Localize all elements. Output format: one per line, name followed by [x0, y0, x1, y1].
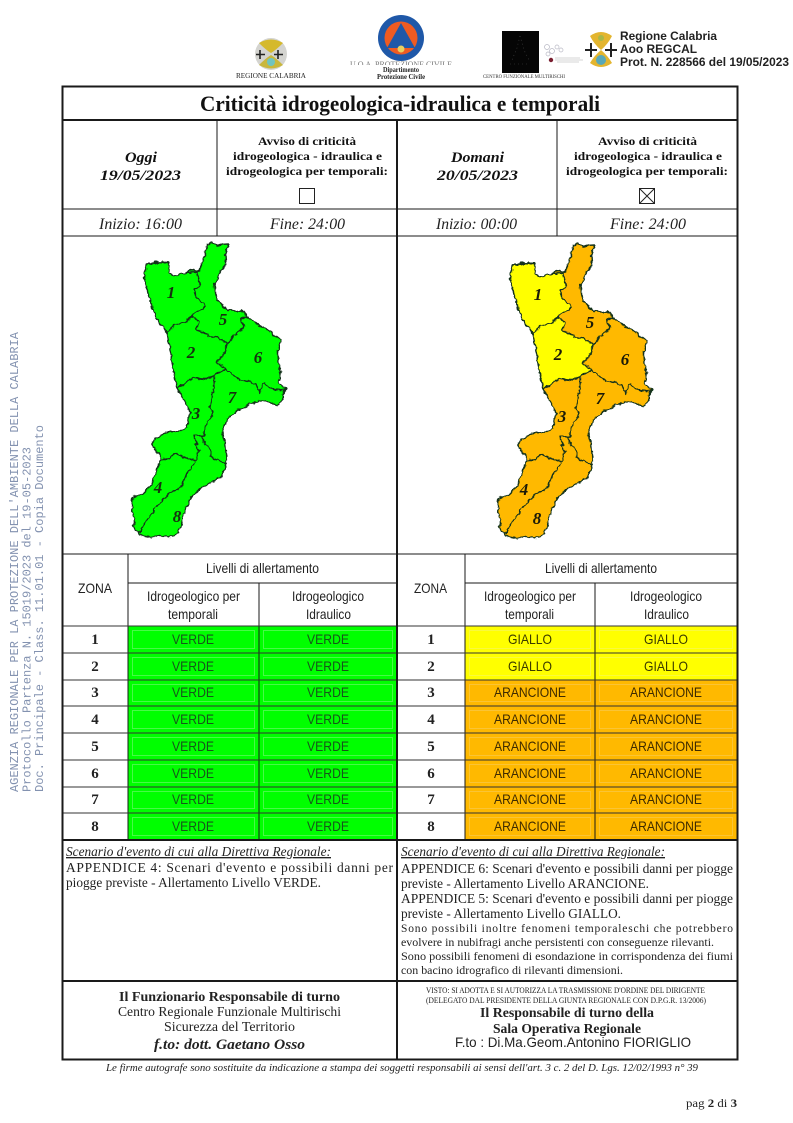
- today table header: Livelli di allertamento: [206, 560, 319, 576]
- panel: today alert table: [78, 560, 397, 840]
- tomorrow levels fill: [465, 626, 737, 840]
- today scenario body: [66, 860, 394, 890]
- tomorrow zone numbers: 3: [427, 685, 435, 701]
- panel: operations room signature: F.to : Di.Ma.Geom.Antonino FIORIGLIO: [455, 1034, 691, 1050]
- panel: tomorrow header: [435, 134, 728, 233]
- tomorrow level labels: GIALLO: [508, 658, 552, 674]
- today level labels: VERDE: [307, 791, 349, 807]
- tomorrow level labels: GIALLO: [644, 658, 688, 674]
- tomorrow table header: Idrogeologico: [630, 588, 702, 604]
- zone numbers tomorrow: 5: [586, 313, 595, 332]
- today table header: Idrogeologico: [292, 588, 364, 604]
- protocol stamp text: [620, 31, 789, 69]
- panel: duty officer signature: Il Funzionario Responsabile di turno: [119, 989, 340, 1004]
- panel: operations room signature: VISTO: SI ADOTTA E SI AUTORIZZA LA TRASMISSIONE D'ORDINE DEL DIRIGENTE: [426, 986, 705, 995]
- today date: [100, 150, 182, 184]
- tomorrow scenario appendices: APPENDICE 5: Scenari d'evento e possibili danni per piogge: [401, 891, 733, 906]
- title: Criticità idrogeologica-idraulica e temporali: [200, 91, 600, 116]
- tomorrow scenario appendices: previste - Allertamento Livello GIALLO.: [401, 906, 621, 921]
- tomorrow end time: Fine: 24:00: [609, 216, 686, 233]
- vertical archive stamp: [8, 331, 47, 792]
- tomorrow warning notice: idrogeologica per temporali:: [566, 164, 728, 178]
- tomorrow zone numbers: 7: [427, 792, 435, 808]
- tomorrow scenario notes: con bacino idrografico di rilevanti dimensioni.: [401, 965, 623, 977]
- tomorrow scenario notes: [401, 923, 733, 977]
- tomorrow checked checkbox: [640, 188, 654, 204]
- zone numbers tomorrow: 1: [534, 285, 542, 304]
- tomorrow level labels: ARANCIONE: [494, 765, 566, 781]
- zone numbers tomorrow: 7: [596, 389, 606, 408]
- logo: Regione Calabria: [236, 38, 307, 80]
- zone numbers today: 1: [167, 283, 175, 302]
- panel: operations room signature: (DELEGATO DAL PRESIDENTE DELLA GIUNTA REGIONALE CON D.P.G.R. 13/2006): [426, 996, 706, 1005]
- zone numbers today: 2: [186, 343, 196, 362]
- panel: today header: [98, 134, 388, 233]
- today zone numbers: 4: [91, 712, 99, 728]
- today level labels: VERDE: [307, 658, 349, 674]
- today table header: Idraulico: [306, 606, 351, 622]
- tomorrow scenario appendices: APPENDICE 6: Scenari d'evento e possibili danni per piogge: [401, 861, 733, 876]
- zone numbers today: 4: [153, 478, 162, 497]
- zone numbers tomorrow: 4: [519, 480, 528, 499]
- tomorrow level labels: GIALLO: [508, 631, 552, 647]
- tomorrow level labels: ARANCIONE: [494, 684, 566, 700]
- map: tomorrow, zones 1-2 yellow and 3-8 orange: [498, 244, 653, 539]
- tomorrow scenario notes: Sono possibili inoltre fenomeni temporaleschi che potrebbero: [401, 923, 733, 935]
- vertical archive stamp: AGENZIA REGIONALE PER LA PROTEZIONE DELL'AMBIENTE DELLA CALABRIA: [8, 331, 22, 792]
- logo: Protezione Civile: U.O.A. PROTEZIONE CIVILE: [350, 60, 452, 69]
- tomorrow zone numbers: 5: [427, 739, 435, 755]
- panel: duty officer signature: Sicurezza del Territorio: [164, 1019, 295, 1034]
- tomorrow level labels: ARANCIONE: [630, 765, 702, 781]
- today level labels: VERDE: [172, 711, 214, 727]
- today warning notice: [226, 134, 388, 178]
- today table header: [78, 560, 364, 622]
- today level labels: VERDE: [172, 738, 214, 754]
- tomorrow date: 20/05/2023: [436, 168, 519, 184]
- today scenario body: piogge previste - Allertamento Livello VERDE.: [66, 875, 321, 890]
- zone numbers today: [153, 283, 263, 526]
- tomorrow level labels: ARANCIONE: [494, 711, 566, 727]
- tomorrow date: Domani: [450, 150, 505, 166]
- panel: tomorrow alert table: [414, 560, 737, 840]
- tomorrow level labels: [494, 631, 702, 834]
- today warning notice: idrogeologica per temporali:: [226, 164, 388, 178]
- today zone numbers: 8: [91, 819, 99, 835]
- protocol stamp text: Aoo REGCAL: [620, 44, 697, 56]
- zone numbers tomorrow: 8: [533, 509, 542, 528]
- tomorrow scenario appendices: [401, 861, 733, 921]
- panel: duty officer signature: [118, 989, 341, 1053]
- today zone numbers: 7: [91, 792, 99, 808]
- today scenario body: APPENDICE 4: Scenari d'evento e possibili danni per: [66, 860, 394, 875]
- map: today, all zones green: [132, 243, 287, 538]
- today date: Oggi: [125, 150, 158, 166]
- zone numbers today: 8: [173, 507, 182, 526]
- today table header: ZONA: [78, 580, 113, 596]
- zone numbers today: 7: [228, 388, 238, 407]
- tomorrow table header: ZONA: [414, 580, 448, 596]
- today start time: Inizio: 16:00: [98, 216, 182, 233]
- tomorrow table header: [414, 560, 702, 622]
- today warning notice: idrogeologica - idraulica e: [233, 149, 383, 163]
- zone numbers tomorrow: 2: [553, 345, 563, 364]
- today level labels: VERDE: [307, 765, 349, 781]
- tomorrow scenario notes: Sono possibili fenomeni di esondazione in corrispondenza dei fiumi: [401, 951, 733, 963]
- logo: Protezione Civile: [345, 15, 457, 81]
- signature footnote: Le firme autografe sono sostituite da indicazione a stampa dei soggetti responsabili ai sensi dell'art. 3 c. 2 del D. Lgs. 12/02/1993 n° 39: [105, 1062, 698, 1074]
- today level labels: VERDE: [172, 791, 214, 807]
- tomorrow zone numbers: 4: [427, 712, 435, 728]
- today zone numbers: 3: [91, 685, 99, 701]
- panel: operations room signature: Sala Operativa Regionale: [493, 1021, 641, 1036]
- tomorrow table header: Livelli di allertamento: [545, 560, 657, 576]
- today zone numbers: 1: [91, 632, 99, 648]
- tomorrow table header: temporali: [505, 606, 554, 622]
- today date: 19/05/2023: [100, 168, 182, 184]
- zone numbers tomorrow: 6: [621, 350, 630, 369]
- today level labels: VERDE: [307, 738, 349, 754]
- tomorrow level labels: ARANCIONE: [630, 684, 702, 700]
- tomorrow zone numbers: [427, 632, 435, 835]
- today level labels: VERDE: [172, 684, 214, 700]
- vertical archive stamp: Protocollo Partenza N. 15019/2023 del 19-05-2023: [20, 447, 34, 792]
- zone numbers tomorrow: 3: [557, 407, 567, 426]
- today end time: Fine: 24:00: [269, 216, 345, 233]
- logo: Regione Calabria: REGIONE CALABRIA: [236, 71, 307, 80]
- today warning notice: Avviso di criticità: [258, 134, 356, 148]
- tomorrow level labels: ARANCIONE: [630, 791, 702, 807]
- today empty checkbox: [300, 188, 314, 204]
- tomorrow date: [436, 150, 519, 184]
- today level labels: VERDE: [307, 818, 349, 834]
- panel: tomorrow event scenario: [401, 844, 733, 977]
- today level labels: VERDE: [172, 765, 214, 781]
- zone numbers today: 5: [219, 310, 228, 329]
- today level labels: VERDE: [172, 658, 214, 674]
- today level labels: [172, 631, 349, 834]
- zone numbers today: 6: [254, 348, 263, 367]
- tomorrow zone numbers: 8: [427, 819, 435, 835]
- panel: operations room signature: [426, 986, 706, 1050]
- tomorrow start time: Inizio: 00:00: [435, 216, 517, 233]
- panel: duty officer signature: f.to: dott. Gaetano Osso: [154, 1037, 305, 1053]
- tomorrow warning notice: [566, 134, 728, 178]
- protocol stamp text: Regione Calabria: [620, 31, 718, 43]
- tomorrow scenario appendices: previste - Allertamento Livello ARANCIONE.: [401, 876, 649, 891]
- zone numbers today: 3: [191, 404, 201, 423]
- tomorrow level labels: ARANCIONE: [494, 738, 566, 754]
- logo: Centro Funzionale Multirischi: CENTRO FUNZIONALE MULTIRISCHI: [483, 74, 565, 80]
- tomorrow scenario notes: evolvere in nubifragi anche persistenti con conseguenze rilevanti.: [401, 937, 714, 949]
- tomorrow level labels: GIALLO: [644, 631, 688, 647]
- today zone numbers: 6: [91, 766, 99, 782]
- tomorrow table header: Idraulico: [644, 606, 689, 622]
- today table header: temporali: [168, 606, 218, 622]
- today level labels: VERDE: [307, 631, 349, 647]
- today levels fill: [128, 626, 397, 840]
- page number: pag 2 di 3: [686, 1096, 737, 1110]
- today zone numbers: [91, 632, 99, 835]
- tomorrow warning notice: idrogeologica - idraulica e: [574, 149, 723, 163]
- tomorrow level labels: ARANCIONE: [630, 818, 702, 834]
- tomorrow table header: Idrogeologico per: [484, 588, 576, 604]
- today zone numbers: 2: [91, 659, 99, 675]
- vertical archive stamp: Doc. Principale - Class. 11.01.01 - Copia Documento: [33, 425, 47, 792]
- tomorrow level labels: ARANCIONE: [630, 738, 702, 754]
- panel: duty officer signature: Centro Regionale Funzionale Multirischi: [118, 1004, 341, 1019]
- tomorrow zone numbers: 2: [427, 659, 435, 675]
- tomorrow warning notice: Avviso di criticità: [598, 134, 697, 148]
- tomorrow level labels: ARANCIONE: [494, 818, 566, 834]
- today table header: Idrogeologico per: [147, 588, 240, 604]
- today level labels: VERDE: [172, 818, 214, 834]
- today scenario heading: Scenario d'evento di cui alla Direttiva Regionale:: [66, 844, 331, 859]
- protocol stamp text: Prot. N. 228566 del 19/05/2023: [620, 57, 789, 69]
- tomorrow level labels: ARANCIONE: [494, 791, 566, 807]
- tomorrow level labels: ARANCIONE: [630, 711, 702, 727]
- today level labels: VERDE: [307, 684, 349, 700]
- logo: Centro Funzionale Multirischi: [483, 31, 583, 80]
- logo: Protezione Civile: Protezione Civile: [377, 73, 425, 81]
- today level labels: VERDE: [307, 711, 349, 727]
- tomorrow scenario heading: Scenario d'evento di cui alla Direttiva Regionale:: [401, 844, 665, 859]
- today zone numbers: 5: [91, 739, 99, 755]
- panel: today event scenario: [66, 844, 394, 890]
- logo: Regione Calabria protocol stamp emblem: [585, 32, 617, 67]
- panel: operations room signature: Il Responsabile di turno della: [480, 1005, 654, 1020]
- logo: Protezione Civile: Dipartimento: [383, 66, 419, 74]
- today level labels: VERDE: [172, 631, 214, 647]
- tomorrow zone numbers: 1: [427, 632, 435, 648]
- zone numbers tomorrow: [519, 285, 630, 528]
- tomorrow zone numbers: 6: [427, 766, 435, 782]
